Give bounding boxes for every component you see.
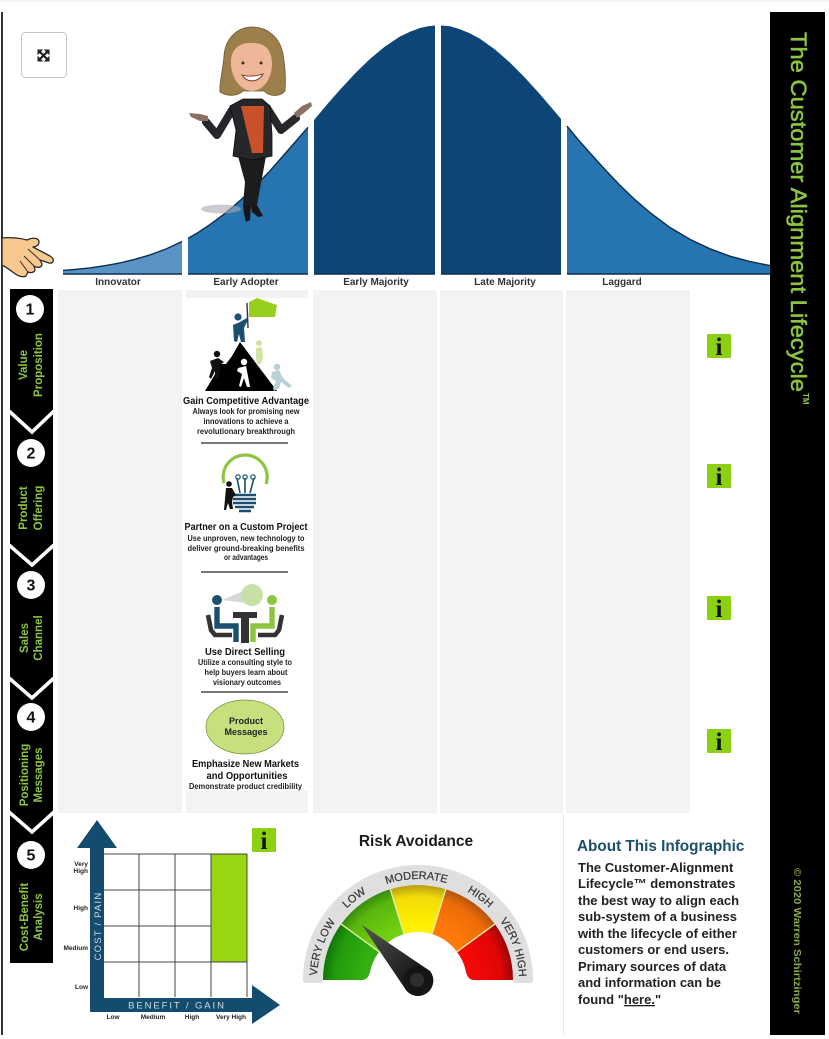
cost scale labels: High <box>74 868 88 875</box>
trademark: TM <box>801 393 810 405</box>
chart: risk gauge <box>303 865 533 996</box>
expand button <box>22 32 66 78</box>
text block: about this infographic: customers or end users. <box>578 942 729 957</box>
step 3 <box>17 571 45 661</box>
step 2: Product <box>18 486 30 530</box>
text block: direct selling: visionary outcomes <box>213 678 281 687</box>
callout: product messages: Product <box>229 716 263 726</box>
text block: competitive advantage: Gain Competitive Advantage <box>183 396 309 407</box>
step 3: 3 <box>27 578 36 594</box>
main title: The Customer Alignment Lifecycle <box>786 32 811 392</box>
icon: info 1: i <box>716 334 723 361</box>
text block: about this infographic: Lifecycle™ demonstrates <box>578 876 736 891</box>
axis labels: adopter categories: Laggard <box>602 277 642 288</box>
step 1: Value <box>18 350 30 380</box>
text block: about this infographic: found "here." <box>578 992 661 1007</box>
text block: about this infographic: with the lifecycle of either <box>577 926 737 941</box>
lifecycle columns <box>58 290 690 813</box>
text block: about this infographic: and information can be <box>578 975 721 990</box>
gauge band labels: VERY LOW <box>309 918 334 976</box>
step 1: 1 <box>26 302 35 318</box>
text block: competitive advantage: Always look for promising new <box>192 407 300 416</box>
step 5: 5 <box>27 848 36 864</box>
gauge band labels: VERY HIGH <box>501 916 527 976</box>
text block: custom project: Use unproven, new technology to <box>188 534 305 543</box>
axis labels: adopter categories: Early Majority <box>343 277 409 288</box>
cost scale labels: Very <box>74 861 88 868</box>
icon: info 4: i <box>716 729 723 756</box>
horizontal axis title: BENEFIT / GAIN <box>128 1000 226 1012</box>
text block: new markets: and Opportunities <box>206 771 288 782</box>
text block: custom project <box>184 522 308 562</box>
step 5: Analysis <box>33 893 45 941</box>
step 2: Offering <box>33 486 45 530</box>
step 2 <box>17 439 45 530</box>
step 1 <box>16 295 45 397</box>
segment: late majority <box>441 26 561 274</box>
icon: direct selling meeting <box>208 584 282 643</box>
cost scale labels: High <box>74 905 88 912</box>
icon: pointing hand <box>2 238 53 277</box>
text block: custom project: or advantages <box>224 553 268 562</box>
step 3: Channel <box>33 615 45 661</box>
benefit scale labels: Very High <box>216 1014 246 1021</box>
vertical axis title: COST / PAIN <box>93 892 104 960</box>
gauge band labels <box>309 871 527 976</box>
callout: product messages: Messages <box>224 727 268 737</box>
gauge band labels: LOW <box>342 886 365 908</box>
axis arrows <box>77 820 280 1024</box>
icon: mountain climbers <box>205 298 292 391</box>
step 5 <box>17 841 45 951</box>
text block: custom project: deliver ground-breaking benefits <box>188 544 305 553</box>
icon: info 5: i <box>261 828 268 855</box>
cost scale labels: Medium <box>63 945 88 952</box>
segment: innovator <box>63 242 182 274</box>
gauge band labels: MODERATE <box>385 871 448 884</box>
icon: light bulb with person <box>223 455 267 511</box>
illustration: presenter woman <box>189 27 312 222</box>
callout: product messages <box>206 700 284 754</box>
step 1: Proposition <box>33 333 45 397</box>
text block: about this infographic: About This Infographic <box>577 838 745 855</box>
step 4: 4 <box>27 710 36 726</box>
axis labels: adopter categories: Early Adopter <box>213 277 279 288</box>
step 4: Messages <box>33 748 45 802</box>
axis labels: adopter categories: Late Majority <box>474 277 536 288</box>
step 4 <box>17 703 45 806</box>
text block: competitive advantage <box>183 396 309 436</box>
icon: info 2 <box>707 464 731 491</box>
benefit scale labels: Medium <box>141 1014 165 1021</box>
text block: about this infographic <box>577 838 745 1007</box>
icon: info 1 <box>707 334 731 361</box>
icon: info 3 <box>707 596 731 623</box>
text block: competitive advantage: revolutionary breakthrough <box>197 427 295 436</box>
text block: about this infographic: sub-system of a business <box>578 909 737 924</box>
copyright: © 2020 Warren Schirtzinger <box>791 868 803 1014</box>
axis labels: adopter categories: Innovator <box>95 277 141 288</box>
text block: about this infographic: the best way to align each <box>578 893 739 908</box>
text block: direct selling: Utilize a consulting style to <box>198 658 292 667</box>
text block: direct selling: help buyers learn about <box>204 668 288 677</box>
benefit scale labels <box>106 1014 246 1021</box>
panel: right title bar <box>770 12 825 1035</box>
step 4: Positioning <box>19 744 31 806</box>
icon: info 5 <box>252 828 276 855</box>
cost scale labels: Low <box>75 984 89 991</box>
segment: early majority <box>314 26 435 274</box>
step 3: Sales <box>19 623 31 653</box>
icon: info 3: i <box>716 596 723 623</box>
step 5: Cost-Benefit <box>19 883 31 951</box>
text block: new markets <box>189 759 303 791</box>
text block: competitive advantage: innovations to achieve a <box>204 417 289 426</box>
text block: custom project: Partner on a Custom Project <box>184 522 308 533</box>
left edge rule <box>1 12 3 1035</box>
chart: cost-benefit matrix <box>63 820 280 1024</box>
curve outlines <box>63 126 770 270</box>
text block: direct selling <box>198 647 292 687</box>
panel: step navigation ribbon <box>9 289 54 963</box>
segment: laggard <box>567 126 770 274</box>
text block: new markets: Emphasize New Markets <box>192 759 299 770</box>
gauge needle <box>362 925 433 996</box>
icon: info 2: i <box>716 464 723 491</box>
benefit scale labels: High <box>185 1014 199 1021</box>
text block: new markets: Demonstrate product credibility <box>189 782 303 791</box>
text block: about this infographic: Primary sources of data <box>578 959 727 974</box>
axis labels: adopter categories <box>95 277 642 288</box>
text block: about this infographic: The Customer-Alignment <box>578 860 734 875</box>
gauge band labels: HIGH <box>468 886 494 908</box>
bell curve chart <box>63 26 770 274</box>
cost scale labels <box>63 861 89 991</box>
icon: info 4 <box>707 729 731 756</box>
step 2: 2 <box>27 446 36 462</box>
benefit scale labels: Low <box>106 1014 120 1021</box>
heading: risk avoidance: Risk Avoidance <box>359 833 474 850</box>
text block: direct selling: Use Direct Selling <box>205 647 285 658</box>
segment: early adopter <box>188 127 308 274</box>
